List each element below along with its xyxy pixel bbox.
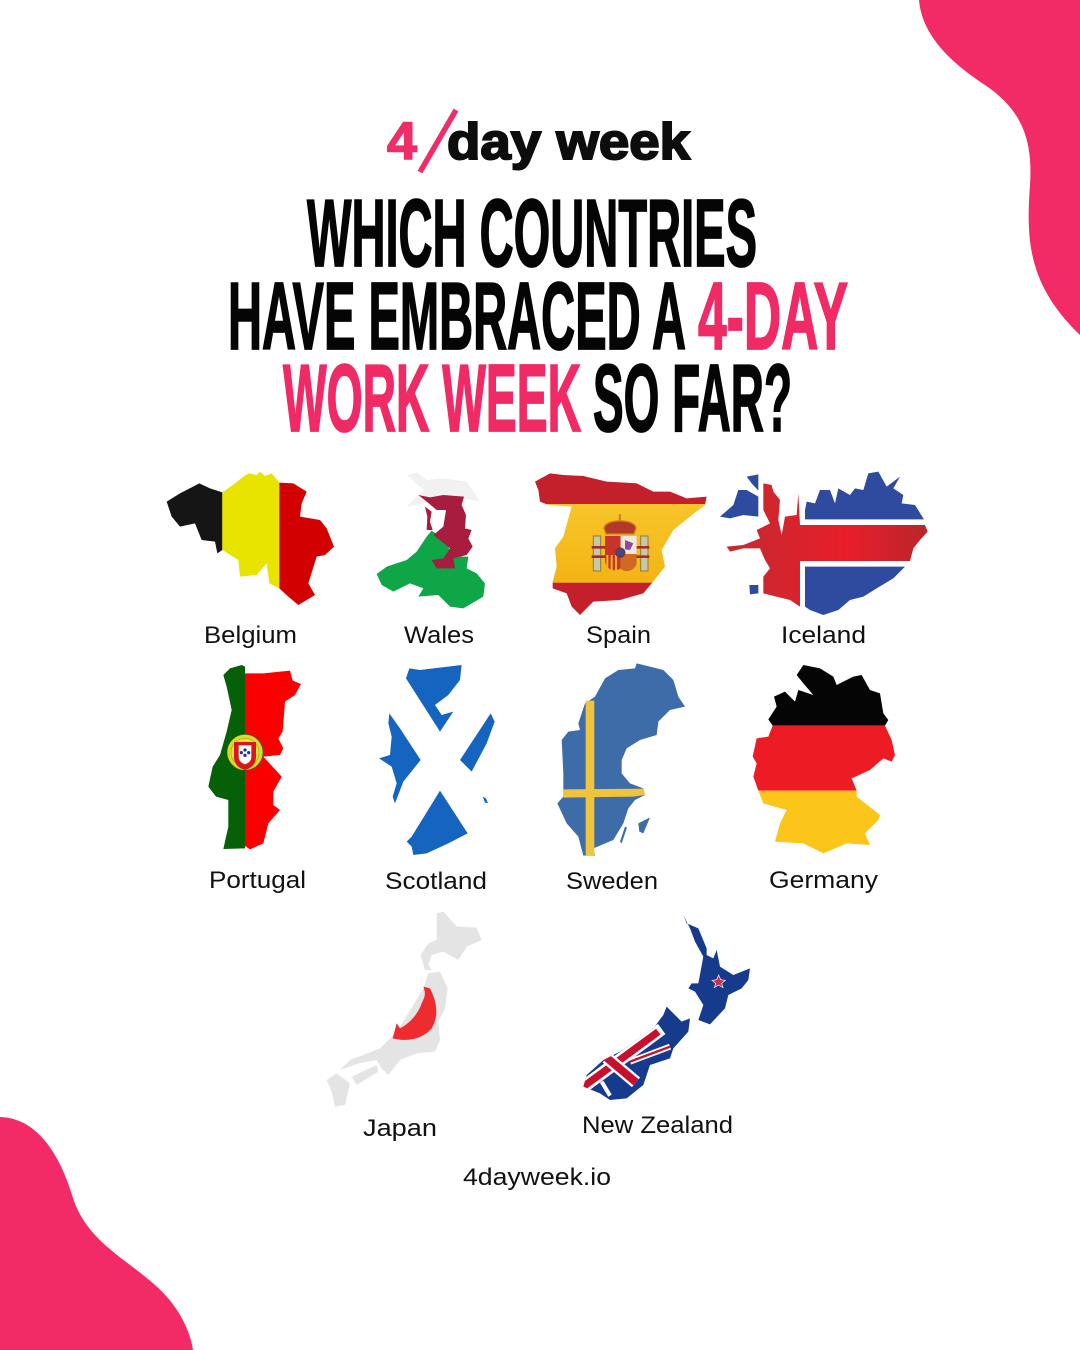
label: Spain: Spain xyxy=(586,622,651,649)
map: Iceland flag xyxy=(720,472,928,615)
label: Sweden: Sweden xyxy=(566,868,658,895)
label: Portugal: Portugal xyxy=(209,867,306,894)
country: Germany xyxy=(753,665,895,894)
country: Spain xyxy=(535,473,707,648)
country: Portugal xyxy=(208,665,306,894)
map: Scotland saltire xyxy=(379,665,495,855)
map: Germany flag xyxy=(753,665,895,853)
label: Germany: Germany xyxy=(769,867,879,894)
icon: red star xyxy=(712,975,725,988)
country: Japan xyxy=(327,912,482,1142)
map: Belgium flag xyxy=(167,472,334,605)
map: Japan flag xyxy=(327,912,482,1107)
country: Iceland xyxy=(720,472,928,649)
country: Scotland xyxy=(379,665,495,895)
decorative blob: top right xyxy=(919,0,1080,335)
title: WORK WEEK xyxy=(283,345,581,452)
title: SO FAR? xyxy=(593,345,792,452)
title xyxy=(228,180,848,452)
country: New Zealand xyxy=(580,915,750,1139)
icon: coat of arms xyxy=(592,514,649,571)
logo: 4/day week: day week xyxy=(447,113,691,170)
map: Wales flag xyxy=(377,473,485,608)
map: Portugal flag xyxy=(208,665,301,849)
title: 4-DAY xyxy=(698,263,848,370)
map: New Zealand flag xyxy=(580,915,750,1102)
label: New Zealand: New Zealand xyxy=(582,1112,733,1139)
label: Japan: Japan xyxy=(363,1115,437,1142)
label: Wales: Wales xyxy=(404,622,474,649)
logo: 4/day week: 4 xyxy=(387,112,418,171)
country: Belgium xyxy=(167,472,334,649)
map: Spain flag xyxy=(535,473,707,615)
label: Belgium: Belgium xyxy=(204,622,297,649)
country: Wales xyxy=(377,473,485,649)
icon: Portuguese emblem xyxy=(227,734,263,770)
label: Scotland: Scotland xyxy=(385,868,487,895)
website URL: 4dayweek.io xyxy=(463,1164,611,1191)
map: Sweden flag xyxy=(557,663,685,856)
label: Iceland: Iceland xyxy=(781,622,866,649)
decorative blob: bottom left xyxy=(0,1117,193,1350)
country: Sweden xyxy=(557,663,685,895)
logo: 4/day week xyxy=(387,110,691,172)
